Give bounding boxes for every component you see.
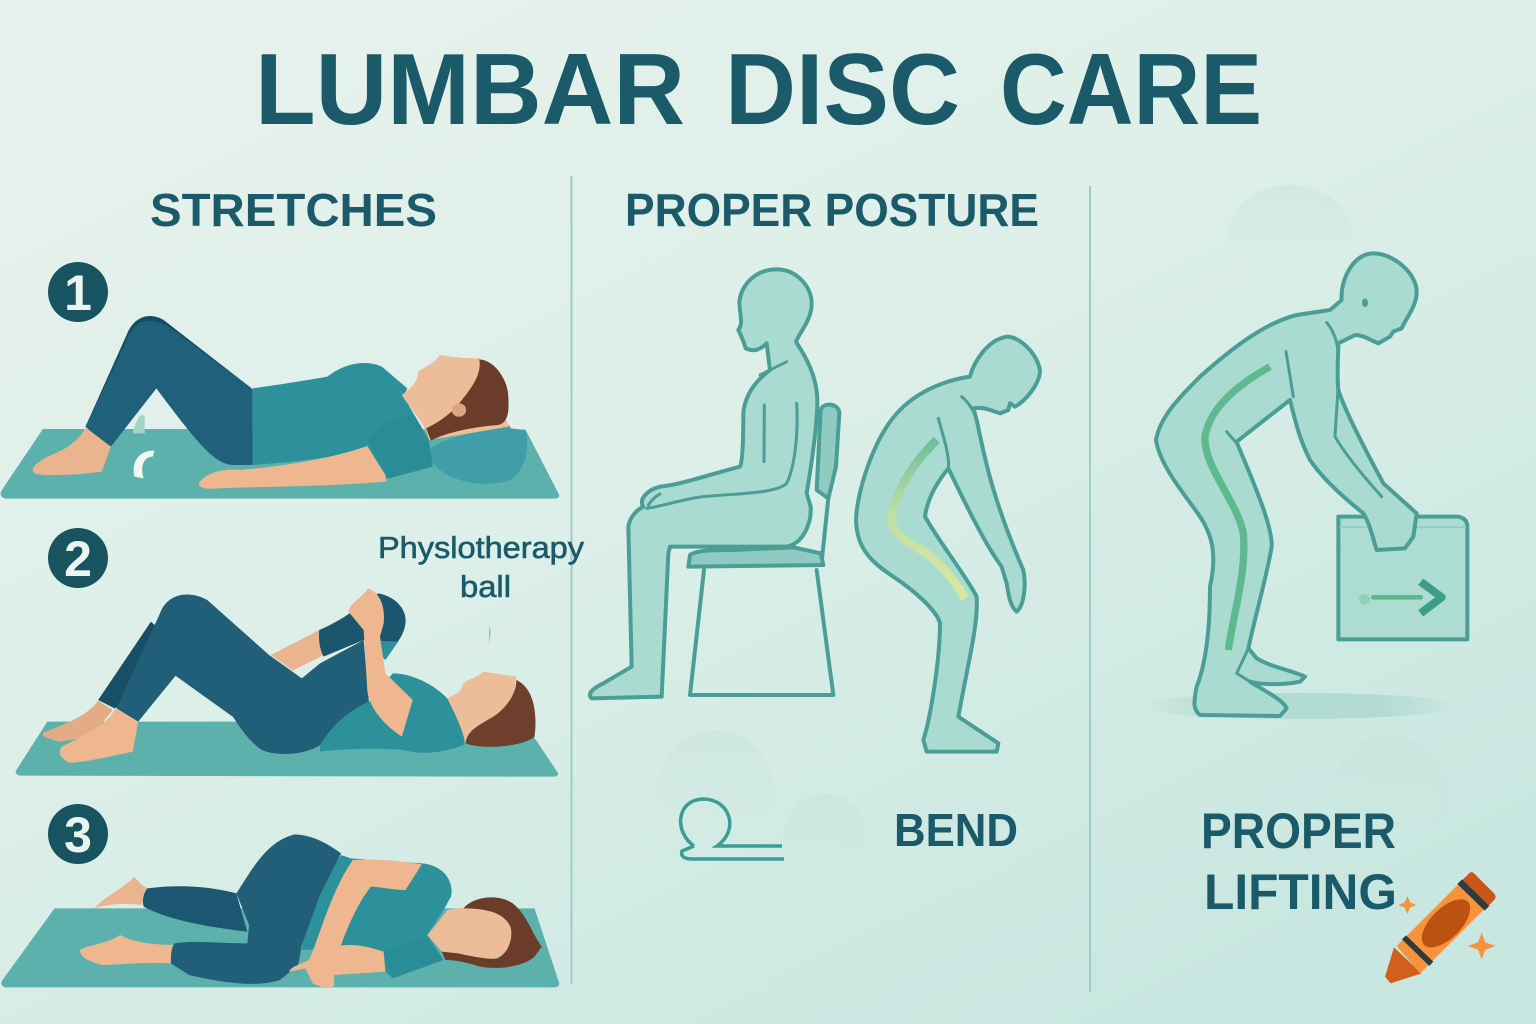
step 1 badge: 1	[64, 265, 92, 321]
panel: proper posture	[590, 184, 1040, 859]
hair	[442, 897, 542, 968]
ground shadow	[1140, 693, 1460, 719]
box	[1338, 517, 1467, 639]
step 3 badge	[48, 804, 108, 864]
label: bend: BEND	[894, 804, 1018, 856]
near leg	[116, 595, 369, 754]
bending figure with bad back	[856, 337, 1040, 752]
title: CARE	[1000, 34, 1262, 146]
lower arm	[335, 945, 385, 975]
stretch 2: figure hugging knee	[16, 588, 558, 777]
spine highlight: bent	[891, 440, 965, 598]
sleeve	[367, 415, 433, 478]
arrow on box	[1359, 582, 1442, 613]
label: proper lifting	[1201, 803, 1397, 920]
step 2 badge	[48, 528, 108, 588]
sitting figure on chair	[590, 269, 839, 698]
chair	[688, 405, 839, 695]
icon: orange crayon	[1385, 872, 1496, 983]
arm and hand	[289, 860, 422, 988]
hair	[426, 359, 509, 441]
raised calf	[319, 593, 406, 658]
feet	[43, 701, 113, 742]
panel: stretches	[1, 184, 585, 988]
icon: small figure lying	[681, 799, 784, 859]
pillow	[428, 425, 527, 484]
lifting figure with box	[1156, 253, 1467, 716]
heading: stretches: STRETCHES	[150, 184, 437, 236]
stretch 3: side-lying figure	[1, 834, 559, 988]
front foot	[80, 935, 174, 965]
arm	[199, 446, 386, 489]
thigh and knee	[171, 834, 341, 984]
head	[447, 672, 516, 743]
back leg	[143, 886, 247, 932]
far leg	[98, 622, 182, 708]
step 3 badge: 3	[64, 807, 92, 863]
label: physiotherapy ball: Physlotherapy	[378, 530, 585, 565]
title: LUMBAR	[255, 34, 685, 146]
shirt	[302, 855, 452, 978]
torso	[253, 363, 433, 478]
torso	[320, 673, 464, 753]
step 1 badge	[48, 262, 108, 322]
title: DISC	[725, 34, 960, 146]
foot	[33, 427, 111, 475]
head	[427, 907, 513, 960]
label: physiotherapy ball: ball	[460, 569, 511, 604]
arm and hand	[348, 588, 413, 737]
panel: proper lifting	[1140, 253, 1496, 983]
stretch 1: figure lying with knees bent	[1, 316, 559, 499]
legs	[85, 316, 252, 447]
ankle	[271, 630, 324, 671]
body	[1156, 253, 1417, 716]
label: proper lifting: LIFTING	[1204, 864, 1397, 920]
heading: proper posture: PROPER POSTURE	[625, 184, 1039, 236]
spine highlight: straight	[1205, 367, 1270, 650]
label: physiotherapy ball	[378, 530, 585, 604]
back foot	[95, 877, 147, 908]
title	[255, 34, 1262, 146]
step 2 badge: 2	[64, 531, 92, 587]
hair	[465, 680, 535, 747]
head	[402, 355, 509, 440]
sitting body	[590, 269, 817, 698]
label: proper lifting: PROPER	[1201, 803, 1396, 859]
